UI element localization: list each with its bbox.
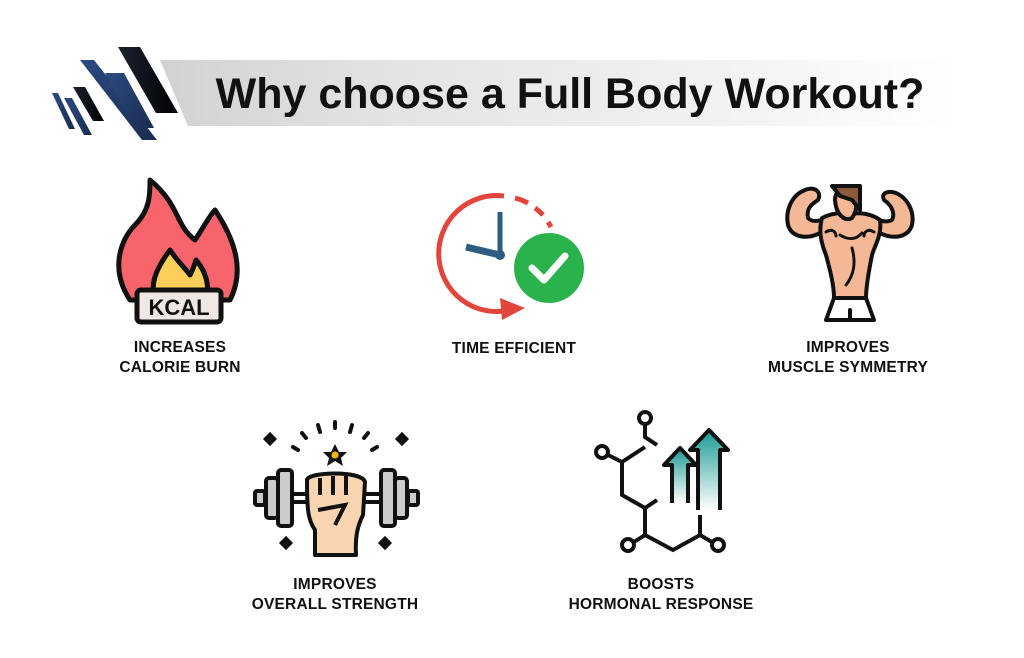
- label: strength: OVERALL STRENGTH: [252, 596, 418, 613]
- logo: [52, 47, 178, 140]
- icon: bodybuilder: [785, 184, 915, 322]
- label: calorie: INCREASES: [134, 339, 226, 356]
- label: muscle: [768, 339, 928, 376]
- label: hormonal: HORMONAL RESPONSE: [569, 596, 753, 613]
- label: calorie: CALORIE BURN: [119, 359, 241, 376]
- head: [835, 187, 856, 219]
- icon: flame kcal: [116, 178, 240, 324]
- label: hormonal: BOOSTS: [628, 576, 694, 593]
- label: calorie: [119, 339, 241, 376]
- label: strength: IMPROVES: [293, 576, 377, 593]
- header band: [160, 60, 810, 126]
- torso: [820, 213, 880, 298]
- icon: hormone: [594, 410, 730, 553]
- shorts: [826, 298, 874, 320]
- label: muscle: IMPROVES: [806, 339, 890, 356]
- arms: [787, 189, 825, 237]
- label: strength: [252, 576, 418, 613]
- label: hormonal: [569, 576, 753, 613]
- label: muscle: MUSCLE SYMMETRY: [768, 359, 928, 376]
- icon: clock: [436, 193, 584, 320]
- icon: flame kcal: KCAL: [148, 295, 210, 320]
- title: Why choose a Full Body Workout?: [216, 70, 924, 118]
- label: time: TIME EFFICIENT: [452, 340, 576, 357]
- icon: dumbbell fist: [253, 420, 420, 557]
